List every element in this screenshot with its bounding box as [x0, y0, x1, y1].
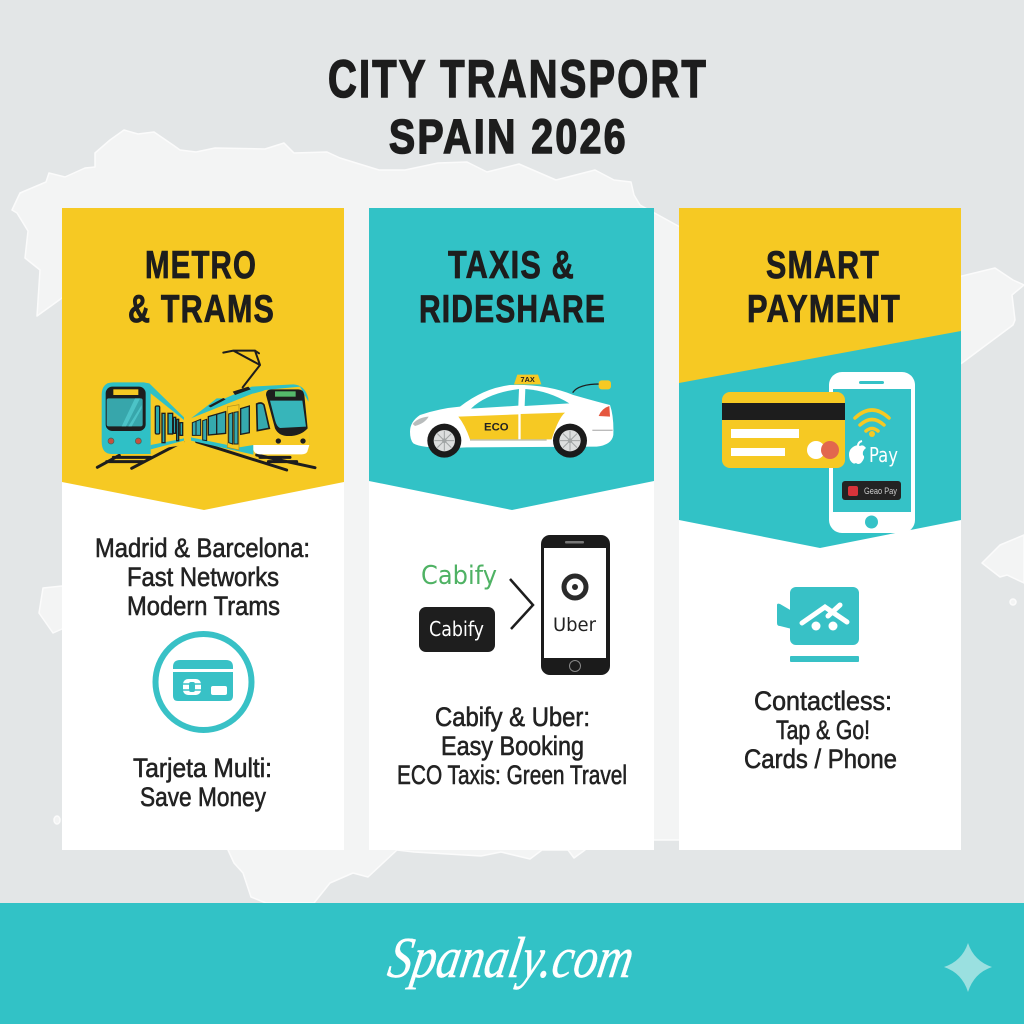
icon: phone with payment apps: Pay [869, 443, 898, 467]
heading: metro and trams: & TRAMS [128, 288, 275, 331]
icon: eco taxi: ECO [484, 422, 509, 434]
text: tarjeta multi [133, 753, 272, 812]
panel: metro and trams [62, 208, 344, 850]
icon: phone with uber [541, 535, 610, 675]
text: networks: Madrid & Barcelona: [95, 533, 310, 563]
footer band [0, 903, 1024, 1024]
text: tarjeta multi: Save Money [140, 782, 266, 812]
icon: eco taxi: 7AX [521, 375, 535, 384]
heading: smart payment: PAYMENT [747, 288, 901, 331]
icon: metro and tram illustration [97, 351, 315, 470]
text: booking: ECO Taxis: Green Travel [397, 760, 627, 790]
logo: cabify green: Cabify [421, 561, 497, 591]
text: booking [397, 702, 627, 790]
footer brand: Spanaly.com [384, 925, 639, 990]
title: SPAIN 2026 [389, 111, 628, 164]
heading: taxis and rideshare: TAXIS & [448, 244, 575, 287]
heading: metro and trams [128, 244, 275, 331]
heading: metro and trams: METRO [145, 244, 257, 287]
text: networks: Fast Networks [127, 562, 279, 592]
text: contactless: Contactless: [754, 686, 892, 716]
arrow: chevron to phone [510, 579, 533, 629]
text: contactless: Cards / Phone [744, 744, 897, 774]
text: contactless: Tap & Go! [776, 715, 870, 745]
heading: smart payment [747, 244, 901, 331]
icon: phone with payment apps [829, 372, 915, 533]
logo: cabify badge: Cabify [429, 617, 484, 641]
text: booking: Cabify & Uber: [435, 702, 590, 732]
panel: smart payment [679, 208, 961, 850]
icon: transport card in circle [156, 634, 252, 730]
text: networks: Modern Trams [127, 591, 280, 621]
title: CITY TRANSPORT [328, 50, 708, 109]
icon: sparkle [944, 943, 992, 992]
icon: contactless terminal [777, 587, 859, 662]
panel: taxis and rideshare [369, 208, 654, 850]
heading: smart payment: SMART [766, 244, 880, 287]
text: contactless [744, 686, 897, 774]
title [328, 50, 708, 164]
text: booking: Easy Booking [441, 731, 584, 761]
text: tarjeta multi: Tarjeta Multi: [133, 753, 272, 783]
icon: yellow bank card [722, 392, 845, 468]
background map of Spain [12, 130, 1024, 903]
icon: phone with uber: Uber [553, 614, 596, 636]
heading: taxis and rideshare [419, 244, 606, 331]
heading: taxis and rideshare: RIDESHARE [419, 288, 606, 331]
icon: eco taxi [410, 375, 613, 458]
icon: phone with payment apps: Geao Pay [864, 486, 897, 497]
text: networks [95, 533, 310, 621]
logo: cabify badge [419, 607, 495, 652]
